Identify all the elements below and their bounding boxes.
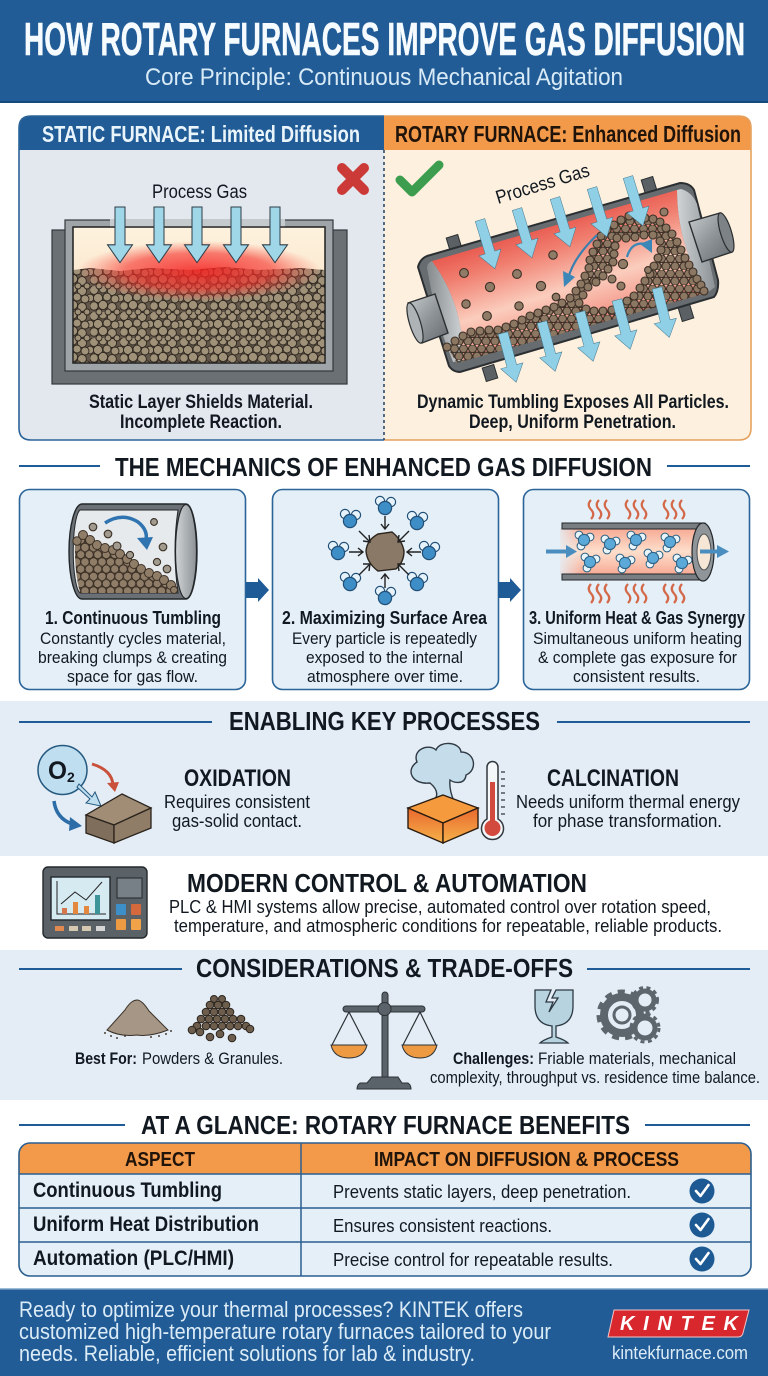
caption: static bbox=[89, 392, 313, 433]
card text: breaking clumps & creating bbox=[38, 648, 227, 667]
icon: tumbling drum bbox=[69, 504, 197, 599]
subtitle: Core Principle: Continuous Mechanical Agitation bbox=[145, 64, 623, 91]
text: oxidation: OXIDATION bbox=[184, 765, 291, 792]
table: benefits bbox=[19, 1143, 751, 1276]
text: modern control bbox=[169, 868, 722, 936]
card: continuous tumbling bbox=[20, 490, 246, 690]
card text: & complete gas exposure for bbox=[538, 648, 737, 667]
heading: mechanics of enhanced gas diffusion: THE MECHANICS OF ENHANCED GAS DIFFUSION bbox=[115, 452, 652, 482]
panel: static furnace bbox=[19, 116, 384, 440]
panel: rotary furnace bbox=[384, 116, 751, 440]
card text bbox=[282, 608, 488, 686]
card text bbox=[529, 608, 745, 686]
label: process gas rotated: Process Gas bbox=[493, 160, 592, 209]
icon: heated tube bbox=[546, 500, 729, 603]
icon: gears bbox=[599, 988, 659, 1042]
caption: static: Static Layer Shields Material. bbox=[89, 392, 313, 413]
text: challenges bbox=[430, 1049, 760, 1087]
caption: rotary bbox=[417, 392, 729, 433]
text: challenges: Challenges: bbox=[453, 1049, 534, 1068]
card text: exposed to the internal bbox=[306, 648, 463, 667]
arrow: step 1 to 2 bbox=[246, 578, 269, 602]
website: kintekfurnace.com bbox=[612, 1343, 748, 1363]
heading: CONSIDERATIONS & TRADE-OFFS bbox=[196, 953, 573, 983]
text: calcination: for phase transformation. bbox=[533, 811, 722, 831]
row: continuous tumbling: Prevents static layers, deep penetration. bbox=[333, 1182, 631, 1202]
card text: 2. Maximizing Surface Area bbox=[282, 608, 488, 628]
arrow: step 2 to 3 bbox=[498, 578, 521, 602]
section: modern control and automation bbox=[43, 867, 722, 938]
heading: at a glance: AT A GLANCE: ROTARY FURNACE BENEFITS bbox=[141, 1110, 630, 1140]
table header: ASPECT bbox=[125, 1149, 195, 1171]
row: automation: Automation (PLC/HMI) bbox=[33, 1247, 234, 1270]
row: uniform heat distribution bbox=[33, 1212, 714, 1238]
icon: calcination bbox=[408, 743, 505, 843]
call to action text: customized high-temperature rotary furnaces tailored to your bbox=[19, 1319, 551, 1344]
icon: granule pile bbox=[188, 996, 254, 1042]
card: uniform heat and gas synergy bbox=[524, 490, 750, 690]
icon: powder pile bbox=[104, 1000, 172, 1038]
text: oxidation: gas-solid contact. bbox=[172, 811, 302, 831]
row: automation bbox=[33, 1246, 714, 1272]
caption: static: Incomplete Reaction. bbox=[120, 412, 282, 433]
row: uniform heat distribution: Uniform Heat Distribution bbox=[33, 1213, 259, 1236]
static furnace diagram bbox=[52, 207, 347, 384]
text: oxidation: Requires consistent bbox=[164, 792, 310, 812]
icon: control panel bbox=[43, 867, 147, 938]
logo: KINTEK: KINTEK bbox=[620, 1313, 740, 1335]
text: calcination bbox=[516, 765, 740, 831]
text: calcination: Needs uniform thermal energy bbox=[516, 792, 740, 812]
icon: particle with gas molecules bbox=[328, 496, 440, 605]
section: considerations and trade-offs bbox=[0, 950, 768, 1100]
call to action text: Ready to optimize your thermal processes? KINTEK offers bbox=[19, 1297, 523, 1322]
row: automation: Precise control for repeatable results. bbox=[333, 1250, 613, 1270]
row: continuous tumbling bbox=[33, 1178, 714, 1204]
card text: atmosphere over time. bbox=[307, 667, 463, 686]
icon: green check bbox=[400, 165, 439, 192]
icon: red cross bbox=[342, 168, 364, 190]
caption: rotary: Deep, Uniform Penetration. bbox=[469, 412, 676, 433]
card text: 1. Continuous Tumbling bbox=[45, 608, 221, 628]
panel: static vs rotary comparison bbox=[19, 116, 751, 440]
table header bbox=[125, 1149, 679, 1171]
card text: space for gas flow. bbox=[67, 667, 198, 686]
call to action text: needs. Reliable, efficient solutions for lab & industry. bbox=[19, 1341, 475, 1366]
label: process gas: Process Gas bbox=[152, 182, 247, 203]
row: uniform heat distribution: Ensures consistent reactions. bbox=[333, 1216, 552, 1236]
icon: oxidation bbox=[38, 746, 151, 843]
call to action text bbox=[19, 1297, 551, 1366]
card text: Simultaneous uniform heating bbox=[533, 629, 742, 648]
text: challenges: Friable materials, mechanical bbox=[538, 1049, 736, 1068]
text: calcination: CALCINATION bbox=[547, 765, 679, 792]
icon: balance scale bbox=[331, 992, 437, 1089]
logo: KINTEK bbox=[608, 1310, 749, 1337]
card: maximizing surface area bbox=[272, 490, 498, 690]
text: modern control: PLC & HMI systems allow precise, automated control over rotation speed, bbox=[169, 897, 711, 917]
text: oxidation bbox=[164, 765, 310, 831]
header banner bbox=[0, 0, 768, 103]
card text: Constantly cycles material, bbox=[40, 629, 226, 648]
icon: oxidation: O bbox=[48, 757, 67, 785]
text: modern control: temperature, and atmospheric conditions for repeatable, reliable products. bbox=[174, 916, 722, 936]
card text: Every particle is repeatedly bbox=[292, 629, 477, 648]
table header: IMPACT ON DIFFUSION & PROCESS bbox=[374, 1149, 679, 1171]
text: best for: Powders & Granules. bbox=[142, 1049, 283, 1068]
icon: oxidation: 2 bbox=[67, 769, 75, 785]
footer banner bbox=[0, 1288, 768, 1376]
row: continuous tumbling: Continuous Tumbling bbox=[33, 1179, 222, 1202]
text: modern control: MODERN CONTROL & AUTOMATION bbox=[187, 868, 587, 898]
card text: consistent results. bbox=[573, 667, 700, 686]
text: best for bbox=[75, 1049, 283, 1068]
heading: static furnace: STATIC FURNACE: Limited Diffusion bbox=[42, 121, 360, 147]
section: enabling key processes bbox=[0, 701, 768, 856]
card text bbox=[38, 608, 227, 686]
icon: broken glass bbox=[535, 990, 573, 1043]
text: best for: Best For: bbox=[75, 1049, 137, 1068]
rotary drum diagram bbox=[404, 174, 737, 385]
heading: ENABLING KEY PROCESSES bbox=[229, 706, 540, 736]
